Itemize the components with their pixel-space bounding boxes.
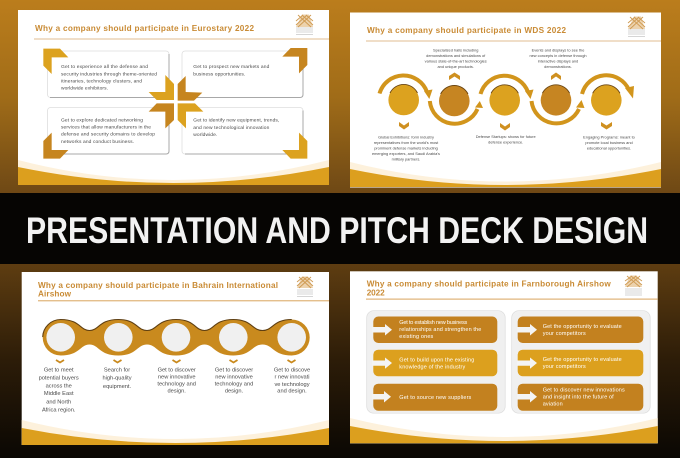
card: defense industries: worldwide exhibitors. xyxy=(61,86,108,92)
text: new suppliers: Get to source new suppliers xyxy=(399,395,472,401)
text: evaluate competitors 2 xyxy=(543,357,622,370)
title: Why a company should participate in Farnborough Airshow xyxy=(367,279,611,288)
text: innovative technology 2: Get to discover xyxy=(215,367,253,373)
text: innovative technology 3: Get to discove xyxy=(274,367,310,373)
panel: WDS slide xyxy=(350,12,661,188)
text: global exhibitions: representatives from the world's most xyxy=(374,140,439,145)
text: engaging programs: Engaging Programs: meant to xyxy=(583,134,635,140)
text: high-quality equipment: Search for xyxy=(104,367,130,373)
text: evaluate competitors 2: Get the opportunity to evaluate xyxy=(543,357,622,363)
text: innovative technology 2: technology and xyxy=(215,382,253,388)
card: networking: defense and security domains to develop xyxy=(61,132,155,138)
text: innovative technology 2: design. xyxy=(225,388,244,394)
text: business relationships xyxy=(399,320,481,340)
text: innovative technology 2 xyxy=(215,367,253,394)
arrows: connecting arcs xyxy=(380,75,629,124)
card: new equipment: worldwide. xyxy=(193,132,217,138)
logo xyxy=(297,276,313,296)
text: evaluate competitors 1: Get the opportunity to evaluate xyxy=(543,324,622,330)
card: defense industries: security industries through theme-oriented xyxy=(61,71,157,77)
text: innovative technology 1: Get to discover xyxy=(158,367,196,373)
text: global exhibitions: prominent defense markets including xyxy=(374,146,438,150)
text: engaging programs xyxy=(583,134,635,150)
icon: corner and centre arrows xyxy=(43,48,307,159)
card: new markets: Get to prospect new markets and xyxy=(193,64,270,70)
text: existing knowledge xyxy=(399,357,474,370)
text: engaging programs: educational opportunities. xyxy=(587,146,631,150)
banner: black title band xyxy=(0,193,680,264)
text: events and displays: demonstrations. xyxy=(544,64,572,69)
text: high-quality equipment xyxy=(102,367,132,390)
logo xyxy=(625,276,642,295)
text: potential buyers xyxy=(39,367,79,413)
panel: Bahrain International Airshow slide xyxy=(22,272,329,445)
text: innovative technology 3 xyxy=(274,367,310,395)
text: specialized halls: demonstrations and simulations of xyxy=(426,53,486,58)
arrowheads xyxy=(424,86,634,108)
text: specialized halls: Specialized halls including xyxy=(433,48,478,52)
text: innovative technology 1: new innovative xyxy=(158,375,196,381)
text: potential buyers: Middle East xyxy=(44,391,74,397)
text: potential buyers: potential buyers xyxy=(39,376,79,382)
panel: Eurostary slide xyxy=(18,10,329,185)
text: existing knowledge: knowledge of the industry xyxy=(399,364,466,370)
card: new equipment: and new technological innovation xyxy=(193,125,270,131)
text: global exhibitions: Global Exhibitions: form industry xyxy=(378,134,434,140)
text: specialized halls: various state-of-the-art technologies xyxy=(425,58,487,64)
text: innovative technology 3: ve technology xyxy=(274,382,310,388)
text: innovations and aviation xyxy=(543,388,625,408)
title: 2022 xyxy=(367,288,385,297)
text: innovative technology 3: r new innovati xyxy=(274,375,310,381)
panel: Eurostary slide: Why a company should participate in Eurostary 2022 xyxy=(35,24,254,33)
card: defense industries: itineraries, technology clusters, and xyxy=(61,78,142,84)
arrow icons xyxy=(517,324,537,402)
logo xyxy=(628,16,645,36)
card: networking: Get to explore dedicated networking xyxy=(61,117,143,123)
text: events and displays xyxy=(529,48,587,69)
title xyxy=(38,281,278,298)
text: events and displays: interactive displays and xyxy=(538,58,578,64)
arrow icons xyxy=(372,324,392,402)
card: networking xyxy=(48,108,169,154)
text: global exhibitions: military partners. xyxy=(392,156,420,162)
title: Airshow xyxy=(38,289,72,298)
text: defense startups: defense experience. xyxy=(488,140,523,144)
card: new markets: business opportunities. xyxy=(193,71,245,77)
process circles xyxy=(388,84,622,116)
text: innovations and aviation: aviation xyxy=(543,402,563,408)
text: innovations and aviation: and insight into the future of xyxy=(543,395,614,401)
right grey panel xyxy=(512,311,650,413)
text: events and displays: new concepts in defense through xyxy=(529,53,587,58)
text: high-quality equipment: high-quality xyxy=(102,376,132,382)
text: potential buyers: Get to meet xyxy=(44,367,74,373)
left grey panel xyxy=(367,311,505,413)
chain graphic xyxy=(43,319,310,356)
text: potential buyers: across the xyxy=(46,383,72,389)
card: defense industries: Get to experience all the defense and xyxy=(61,64,148,70)
chevrons xyxy=(399,72,612,130)
text: business relationships: relationships and strengthen the xyxy=(399,327,481,333)
text: potential buyers: Africa region. xyxy=(42,407,76,413)
text: high-quality equipment: equipment. xyxy=(103,384,131,390)
text: business relationships: existing ones xyxy=(399,334,434,340)
text: innovative technology 1: technology and xyxy=(157,382,196,388)
text: specialized halls: and unique products. xyxy=(438,64,474,69)
text: engaging programs: promote local business and xyxy=(585,140,633,145)
chevrons xyxy=(56,360,296,362)
text: events and displays: Events and displays to see the xyxy=(532,48,584,52)
text: defense startups: Defense Startups: shows for future xyxy=(476,134,536,139)
title: Why a company should participate in Bahrain International xyxy=(38,281,278,290)
text: defense startups xyxy=(476,134,536,144)
panel: WDS slide: Why a company should participate in WDS 2022 xyxy=(367,26,566,35)
text: innovations and aviation: Get to discover new innovations xyxy=(543,388,625,394)
text: innovative technology 1 xyxy=(157,367,196,394)
text: specialized halls xyxy=(425,48,487,69)
text: global exhibitions: emerging exporters, and Saudi Arabia's xyxy=(372,151,440,156)
text: existing knowledge: Get to build upon the existing xyxy=(399,357,474,363)
card: new equipment: Get to identify new equipment, trends, xyxy=(193,117,279,123)
text: evaluate competitors 1 xyxy=(543,324,622,337)
card: networking: services that allow manufacturers in the xyxy=(61,125,151,131)
text: innovative technology 2: new innovative xyxy=(215,375,253,381)
logo xyxy=(296,14,313,34)
text: business relationships: Get to establish new business xyxy=(399,320,468,326)
text: evaluate competitors 1: your competitors xyxy=(543,331,586,337)
card: new markets xyxy=(182,51,303,98)
card: new equipment xyxy=(182,108,303,154)
text: evaluate competitors 2: your competitors xyxy=(543,364,586,370)
text: innovative technology 1: design. xyxy=(168,388,186,394)
title xyxy=(367,279,611,297)
text: potential buyers: and North xyxy=(46,399,71,405)
text: global exhibitions xyxy=(372,134,440,162)
card: defense industries xyxy=(48,51,169,98)
card: networking: networks and conduct business. xyxy=(61,139,134,145)
panel: Farnborough Airshow slide xyxy=(350,271,658,443)
text: innovative technology 3: and design. xyxy=(277,389,307,395)
